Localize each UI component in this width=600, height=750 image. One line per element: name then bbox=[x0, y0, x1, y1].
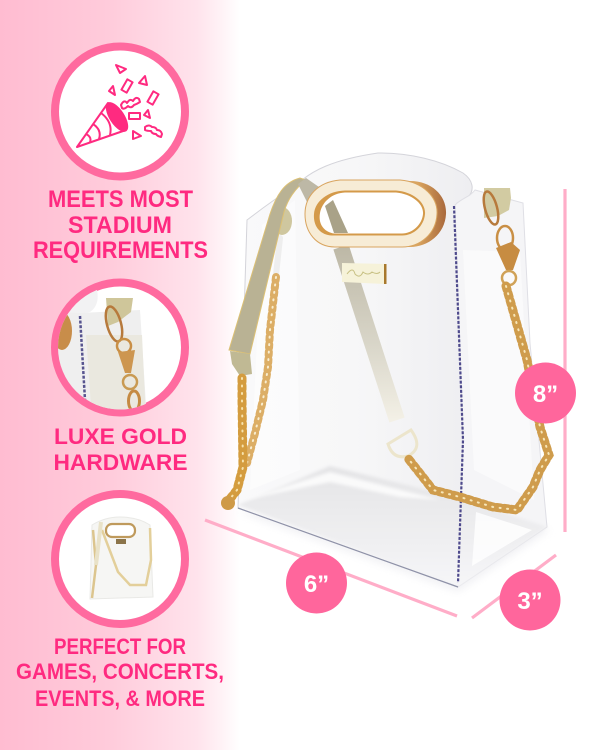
strap end tab bbox=[230, 351, 252, 376]
gold leather tab bbox=[106, 298, 133, 326]
popper cone bbox=[77, 103, 126, 147]
handle brown outer rim bbox=[305, 181, 446, 247]
D ring bbox=[388, 430, 417, 457]
right hardware clasp bbox=[496, 242, 520, 270]
size badge: 8 inches: 8” bbox=[533, 381, 558, 408]
strap seen through handle bbox=[325, 200, 348, 233]
handle inner gold line bbox=[314, 190, 425, 236]
mini bag tag bbox=[116, 539, 126, 544]
handle cream band bbox=[305, 180, 437, 247]
floor side highlight bbox=[472, 512, 532, 566]
feature 2 heading line 2: HARDWARE bbox=[54, 450, 188, 475]
clear bag side panel bbox=[58, 310, 146, 410]
clear bag illustration bbox=[221, 153, 550, 592]
bag interior floor bbox=[238, 466, 547, 587]
mini bag left strap bbox=[96, 522, 101, 565]
bag shadow bbox=[238, 500, 550, 592]
gusset highlight bbox=[86, 335, 145, 410]
mini bag left chain bbox=[92, 530, 96, 598]
bottom stitched edge bbox=[238, 508, 458, 587]
rear chain bbox=[247, 238, 280, 463]
size badge: 8 inches bbox=[515, 362, 576, 424]
handle edge bbox=[58, 315, 72, 350]
size badge: 3 inches bbox=[500, 570, 560, 630]
feature 1 heading line 2: STADIUM bbox=[68, 212, 172, 239]
feature 3 heading line 2: GAMES, CONCERTS, bbox=[16, 659, 224, 684]
loop bbox=[123, 375, 137, 389]
mini bag body bbox=[90, 517, 153, 599]
strap seen behind handle top bbox=[298, 178, 345, 240]
feature 2 photo: gold hardware close-up bbox=[50, 282, 185, 420]
brand tag bbox=[342, 263, 386, 284]
bag front panel bbox=[238, 153, 472, 587]
size badge: 3 inches: 3” bbox=[517, 588, 543, 615]
window panel shade bbox=[250, 200, 300, 490]
confetti pieces bbox=[109, 65, 162, 139]
dimension line: depth bbox=[472, 555, 556, 618]
feature 1 icon: party popper bbox=[55, 46, 185, 176]
rear gold tab bbox=[272, 207, 292, 235]
chain bunch at corner bbox=[221, 496, 235, 510]
background gradient panel bbox=[0, 0, 240, 750]
right hardware tab bbox=[484, 188, 511, 218]
front left chain bbox=[226, 378, 243, 504]
mini bag strap and chain bbox=[102, 528, 151, 585]
rear strap bbox=[341, 247, 397, 420]
purple stitched seam bbox=[454, 206, 463, 583]
clear bag top corner bbox=[66, 290, 98, 316]
feature 3 photo: full bag thumbnail bbox=[55, 494, 185, 624]
seam stitching bbox=[80, 316, 85, 400]
popper mouth bbox=[101, 99, 133, 135]
clasp body bbox=[118, 350, 135, 373]
hardware ring bbox=[104, 305, 124, 342]
side gusset textured strip bbox=[463, 250, 534, 500]
bag side panel bbox=[455, 190, 547, 587]
upper clasp loop bbox=[117, 339, 131, 353]
upper clasp loop bbox=[497, 226, 513, 250]
size badge: 6 inches: 6” bbox=[304, 571, 329, 598]
dimension line: height bbox=[563, 189, 567, 532]
lower clasp ring bbox=[502, 271, 516, 285]
feature 3 heading: PERFECT FOR bbox=[54, 634, 186, 659]
feature 1 heading line 3: REQUIREMENTS bbox=[33, 237, 208, 264]
handle opening bbox=[320, 192, 423, 234]
right chain bbox=[407, 286, 549, 510]
feature 2 heading: LUXE GOLD bbox=[54, 424, 187, 449]
right hardware ring bbox=[481, 190, 501, 226]
dimension line: width bbox=[205, 520, 457, 616]
lower chain link bbox=[128, 391, 140, 411]
feature 1 heading: MEETS MOST bbox=[48, 186, 193, 213]
floor highlights bbox=[244, 472, 440, 500]
size badge: 6 inches bbox=[286, 552, 347, 614]
front strap bbox=[229, 178, 306, 354]
popper stripes bbox=[86, 113, 111, 142]
feature 3 heading line 3: EVENTS, & MORE bbox=[35, 686, 205, 711]
mini bag handle bbox=[106, 524, 135, 537]
